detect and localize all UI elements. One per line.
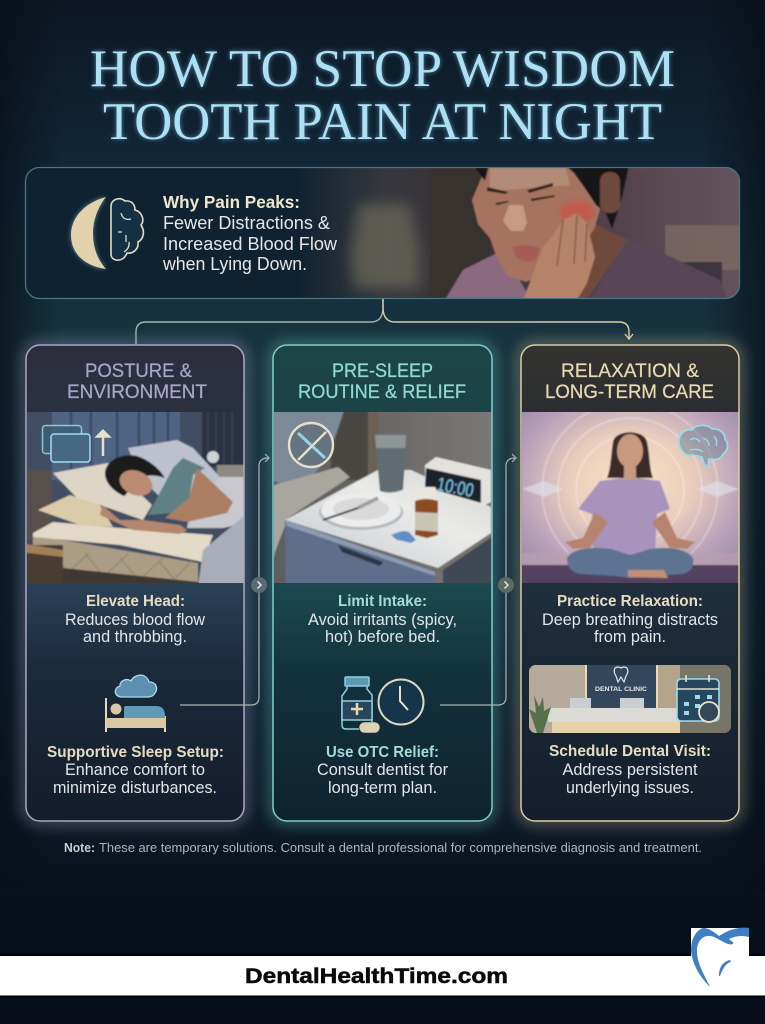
heading: pre-sleep: ROUTINE & RELIEF — [298, 381, 466, 403]
heading: relaxation — [545, 360, 714, 403]
text: why pain peaks: Increased Blood Flow — [163, 234, 338, 254]
note: Note: — [64, 840, 95, 855]
photo: dental clinic: DENTAL CLINIC — [595, 686, 648, 693]
text: schedule dental visit: underlying issues. — [566, 779, 694, 797]
title: TOOTH PAIN AT NIGHT — [103, 93, 662, 151]
photo: dental clinic — [529, 665, 731, 733]
title: HOW TO STOP WISDOM — [90, 40, 675, 98]
text: why pain peaks: Fewer Distractions & — [163, 213, 330, 233]
text: practice relaxation: Deep breathing distracts — [542, 611, 718, 629]
hero photo: man with toothache — [344, 168, 739, 298]
heading: relaxation: LONG-TERM CARE — [545, 381, 714, 403]
heading: posture: ENVIRONMENT — [67, 381, 207, 403]
text: why pain peaks — [162, 192, 338, 274]
text: practice relaxation: Practice Relaxation: — [557, 593, 703, 610]
text: supportive sleep setup — [47, 744, 224, 797]
text: schedule dental visit: Schedule Dental Visit: — [549, 743, 711, 760]
note: These are temporary solutions. Consult a dental professional for comprehensive diagnosis and treatment. — [99, 840, 702, 855]
arrow: first card to second card — [180, 454, 269, 705]
text: why pain peaks: Why Pain Peaks: — [163, 192, 300, 212]
text: limit intake: Avoid irritants (spicy, — [308, 611, 457, 629]
icon: no fork — [289, 423, 333, 467]
icon: bed and cloud — [106, 675, 166, 732]
arrow: hero to cards — [136, 299, 633, 345]
text: supportive sleep setup: Supportive Sleep Setup: — [47, 744, 224, 761]
icon: calendar — [677, 675, 719, 722]
footer band — [0, 954, 765, 997]
title — [90, 40, 675, 151]
text: use otc relief — [317, 744, 449, 797]
text: practice relaxation: from pain. — [594, 628, 666, 646]
text: use otc relief: long-term plan. — [328, 779, 437, 797]
text: elevate head: Elevate Head: — [86, 593, 185, 610]
heading: pre-sleep: PRE-SLEEP — [332, 360, 433, 382]
text: limit intake: Limit Intake: — [338, 593, 427, 610]
icon: moon and brain — [71, 197, 143, 269]
text: limit intake — [308, 593, 457, 646]
photo: nightstand: 10:00 — [435, 474, 475, 502]
panel: relaxation and long-term care — [515, 345, 746, 821]
text: use otc relief: Consult dentist for — [317, 761, 449, 779]
icon: bottle and clock — [342, 677, 424, 732]
text: use otc relief: Use OTC Relief: — [326, 744, 439, 761]
text: supportive sleep setup: minimize disturbances. — [53, 779, 217, 797]
icon: brain — [679, 425, 727, 467]
logo: tooth — [691, 928, 749, 990]
heading: posture — [67, 360, 207, 403]
text: why pain peaks: when Lying Down. — [162, 254, 307, 274]
title: TOOTH PAIN AT NIGHT — [103, 93, 662, 151]
photo: nightstand — [274, 412, 492, 583]
heading: relaxation: RELAXATION & — [561, 360, 699, 382]
text: schedule dental visit: Address persistent — [562, 761, 698, 779]
panel: why pain peaks — [26, 160, 745, 305]
text: elevate head — [65, 593, 205, 646]
text: elevate head: and throbbing. — [83, 628, 187, 646]
text: schedule dental visit — [549, 743, 711, 797]
heading: posture: POSTURE & — [85, 360, 192, 382]
arrow: second card to third card — [440, 454, 516, 705]
panel: pre-sleep routine — [267, 345, 499, 821]
text: elevate head: Reduces blood flow — [65, 611, 205, 629]
text: supportive sleep setup: Enhance comfort to — [65, 761, 205, 779]
text: practice relaxation — [542, 593, 718, 646]
icon: elevated pillows — [42, 426, 110, 462]
text: limit intake: hot) before bed. — [325, 628, 440, 646]
footer website text: DentalHealthTime.com — [245, 965, 508, 988]
panel: posture and environment — [20, 345, 253, 821]
photo: woman sleeping elevated — [27, 412, 244, 583]
title: HOW TO STOP WISDOM — [90, 40, 675, 98]
photo: woman meditating — [522, 412, 738, 583]
heading: pre-sleep — [298, 360, 466, 403]
